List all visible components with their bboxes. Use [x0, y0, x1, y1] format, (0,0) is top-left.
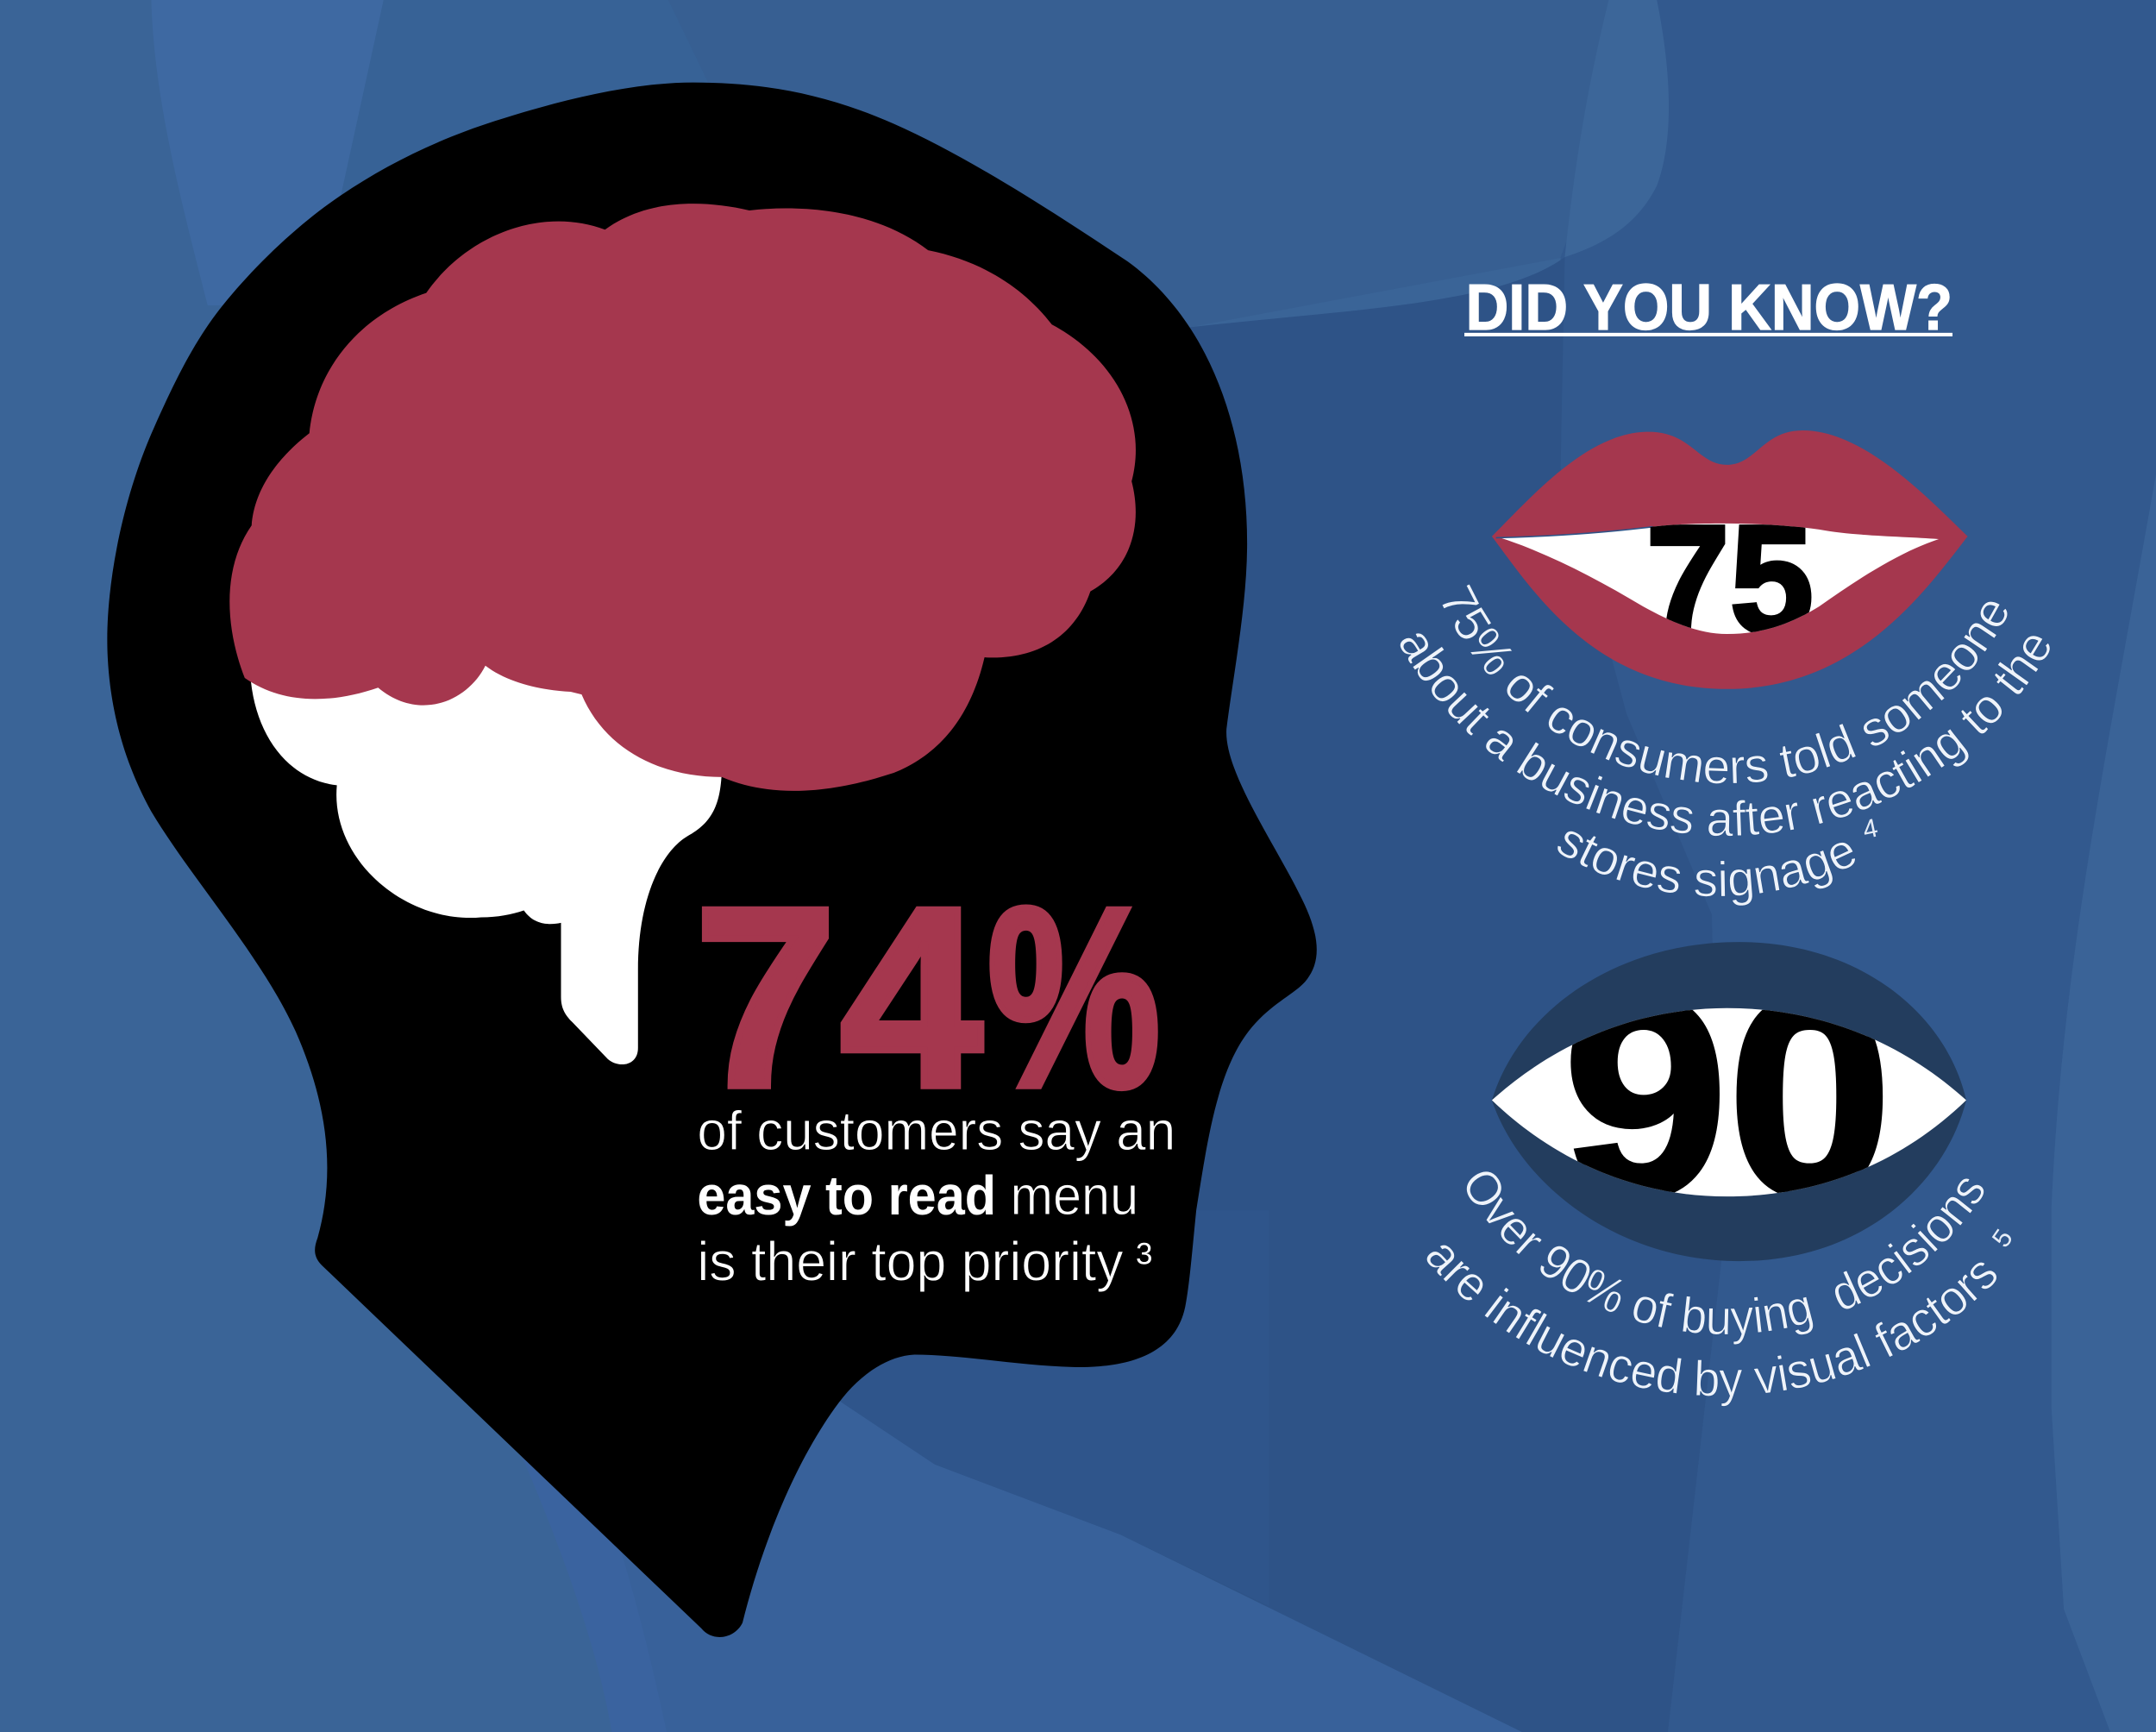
text: eye statistic: 5	[1987, 1225, 2019, 1252]
text: lips statistic: 4	[1860, 814, 1880, 844]
stat: 74%: 4	[840, 855, 984, 1140]
stat: 74%: 7	[694, 855, 837, 1140]
text: eye statistic: Over 90% of buying decisions	[1466, 1171, 1984, 1344]
text: customers say: 3	[1136, 1237, 1152, 1271]
text: lips statistic: about a business after reacting to the	[1401, 633, 2050, 837]
stat: 74%	[694, 855, 1161, 1140]
icon: eye with 90: 90	[1564, 939, 1892, 1254]
heading: did you know: DID YOU KNOW?	[1466, 271, 1952, 343]
text: lips statistic: stores signage	[1557, 831, 1855, 906]
text: customers say	[697, 1100, 1175, 1292]
icon: eye with 90	[1492, 939, 1966, 1261]
text: customers say: is their top priority	[697, 1230, 1124, 1292]
text: customers say: easy to read menu	[697, 1164, 1138, 1227]
icon: lips with 75	[1492, 430, 1968, 689]
text: eye statistic: are influenced by visual factors	[1426, 1245, 1996, 1406]
brain	[229, 204, 1136, 791]
head silhouette	[107, 83, 1317, 1637]
stat: 74%: %	[987, 855, 1161, 1140]
text: lips statistic: 75% of consumers told someone	[1442, 585, 2008, 783]
brain stem and cerebellum	[250, 646, 722, 1064]
text: customers say: of customers say an	[697, 1100, 1175, 1162]
text: lips statistic	[1401, 585, 2050, 906]
icon: lips with 75: 75	[1645, 493, 1814, 665]
